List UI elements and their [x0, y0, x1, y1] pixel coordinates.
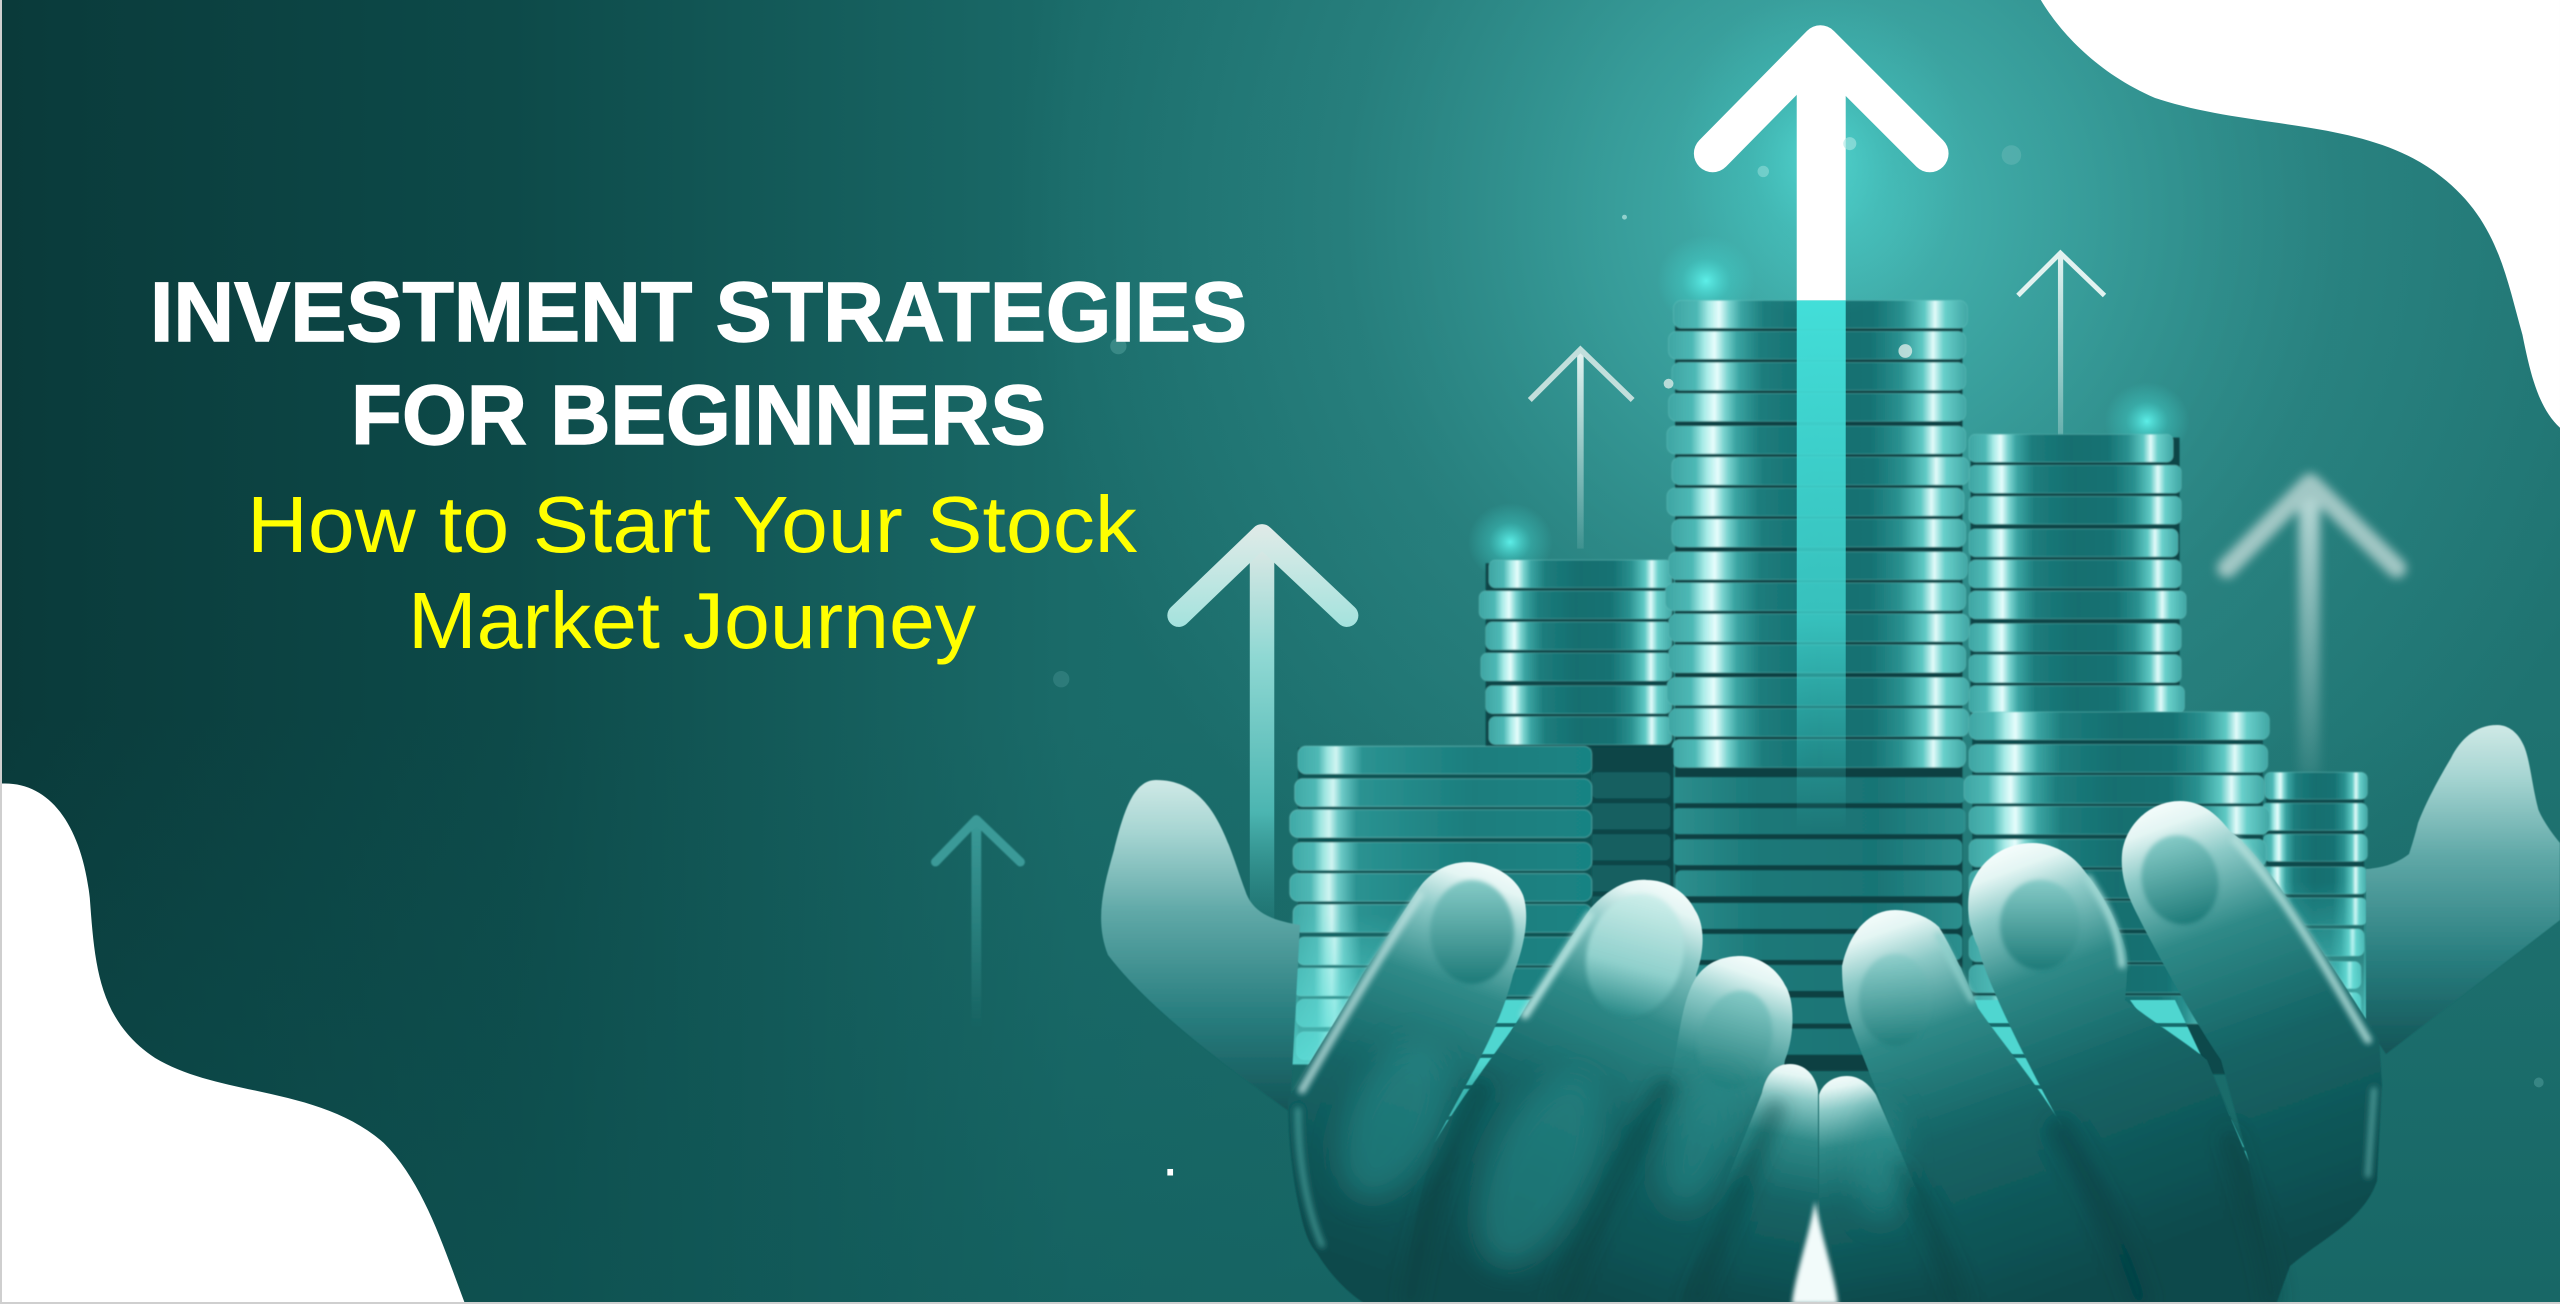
right thumb: [2366, 725, 2560, 1054]
subtitle: [247, 480, 1138, 665]
white blob: top right: [2041, 0, 2560, 428]
title: INVESTMENT STRATEGIES: [150, 265, 1247, 359]
finger: left 2: [1400, 880, 1760, 1304]
coin stack: centre column: [1665, 300, 1969, 1071]
finger: left 4: [1680, 1064, 1818, 1304]
coin stack: centre column lower shaded: [1669, 777, 1966, 1055]
left thumb: [1101, 780, 1300, 1112]
hands: [1101, 725, 2560, 1304]
arrow: thin middle left: [1530, 349, 1633, 549]
white blob: bottom left: [0, 784, 465, 1304]
title: FOR BEGINNERS: [351, 368, 1046, 462]
coin stack: narrow left middle: [1589, 748, 1673, 1074]
finger: left 1: [1288, 862, 1560, 1304]
light sliver between hands: [1792, 1201, 1838, 1304]
arrow: faint small lower left: [936, 820, 1020, 1027]
cyan light between fingers: [1425, 1000, 2255, 1170]
floating particles: [1053, 137, 2544, 1176]
artwork: coins and arrows: [936, 0, 2544, 1176]
phalange lights: [1318, 1024, 1904, 1286]
subtitle: How to Start Your Stock: [247, 480, 1138, 569]
arrow: blurred right: [2227, 483, 2397, 776]
coin stack: upper left: [1479, 560, 1673, 767]
finger shadows and shading: [1410, 1090, 2272, 1300]
arrow: thin upper right: [2018, 253, 2104, 483]
finger: right 4: [2122, 801, 2382, 1304]
coin stack: far right: [2260, 772, 2367, 1053]
subtitle: Market Journey: [408, 576, 976, 665]
fingernails: [1430, 827, 2228, 1098]
finger: left 3: [1560, 956, 1792, 1304]
stack glows: [1468, 235, 2189, 581]
arrow: large left: [1179, 536, 1347, 931]
coin stack: lower right: [1964, 712, 2269, 1074]
finger rim highlights: [1298, 840, 2374, 1245]
finger: right 2: [1842, 910, 2140, 1304]
finger: right 3: [1968, 843, 2276, 1304]
main white arrow: [1673, 0, 1967, 831]
finger: right 1: [1819, 1076, 1960, 1304]
coin stack: upper right: [1969, 434, 2186, 718]
title: [150, 265, 1247, 462]
coin stack: lower left: [1290, 746, 1592, 1064]
